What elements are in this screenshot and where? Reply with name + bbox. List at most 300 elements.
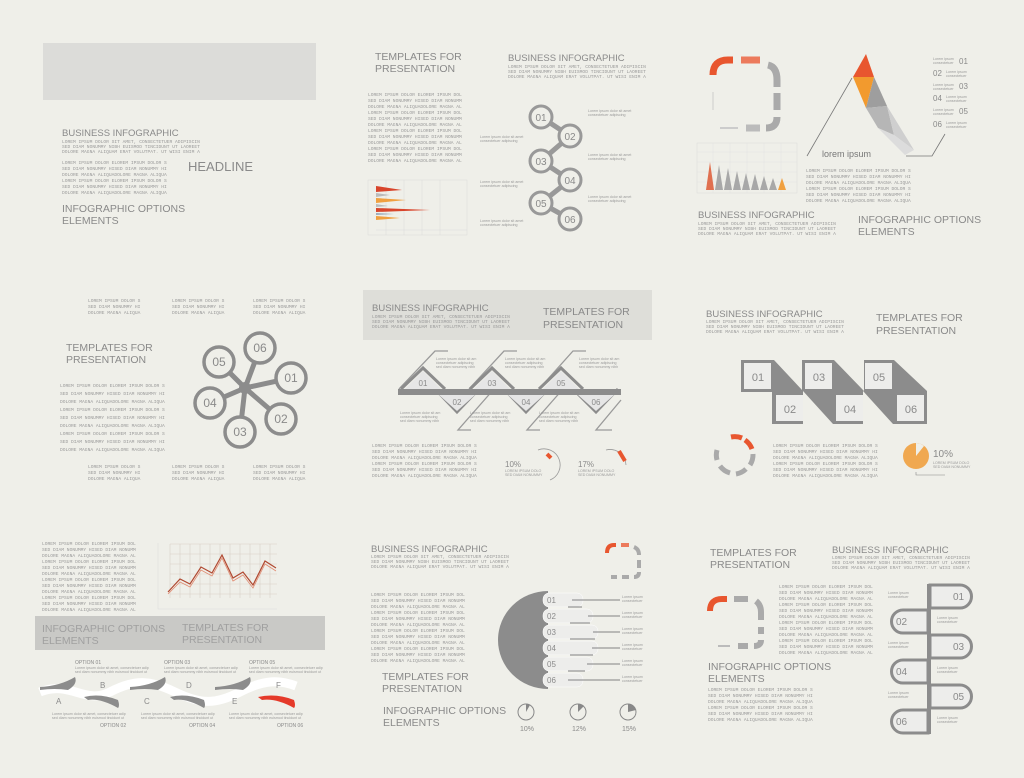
text block: DOLORE MAGNA ALIQUADOLORE MAGNA AL: [371, 604, 465, 610]
half circle chart 01-06: Lorem ipsum: [622, 627, 643, 631]
text block: DOLORE MAGNA ALIQUADOLORE MAGNA AL: [368, 104, 462, 110]
text block: LOREM IPSUM DOLOR ELOREM IPSUM DOLOR S: [806, 186, 911, 192]
pill steps 01-06: 06: [896, 717, 908, 728]
pies: 10% 12% 15%: 12%: [572, 726, 586, 733]
zigzag diagram 01-06: consectetuer adipiscing: [579, 361, 617, 365]
pill steps 01-06: consectetuer: [888, 645, 909, 649]
text blocks top: SED DIAM NONUMMY HI: [253, 304, 306, 310]
zigzag diagram 01-06: Lorem ipsum dolor sit am: [579, 357, 619, 361]
stat: 10%: SED DIAM NONUMMY: [505, 473, 543, 477]
text blocks bottom: LOREM IPSUM DOLOR S: [88, 464, 141, 470]
text block: [368, 92, 462, 164]
text block: SED DIAM NONUMMY HISED DIAM NONUMMY HI: [806, 174, 911, 180]
pill steps 01-06: 03: [953, 642, 965, 653]
text block: LOREM IPSUM DOLOR ELOREM IPSUM DOL: [371, 610, 465, 616]
heading: options: INFOGRAPHIC OPTIONS: [858, 214, 981, 226]
heading: business infographic: LOREM IPSUM DOLOR SIT AMET, CONSECTETUER ADIPISCIN: [508, 64, 646, 70]
heading: templates: [710, 547, 797, 571]
heading: business infographic: SED DIAM NONUMMY NIBH EUISMOD TINCIDUNT UT LAOREET: [698, 226, 836, 232]
text block: SED DIAM NONUMMY HISED DIAM NONUMM: [779, 608, 873, 614]
wave options A-F: sed diam nonummy nibh euismod tincidunt ut: [229, 716, 301, 720]
wave options A-F: sed diam nonummy nibh euismod tincidunt ut: [75, 670, 147, 674]
text block: DOLORE MAGNA ALIQUADOLORE MAGNA AL: [779, 614, 873, 620]
heading: business infographic: [372, 303, 510, 330]
text blocks bottom: SED DIAM NONUMMY HI: [253, 470, 306, 476]
zigzag diagram 01-06: sed diam nonummy nibh: [539, 419, 578, 423]
text block: [371, 592, 465, 664]
panel: bottom-middle half circle: [371, 544, 643, 733]
numbered list 01-06: 02: [933, 69, 942, 78]
numbered list 01-06: Lorem ipsum: [946, 95, 967, 99]
heading: business infographic: BUSINESS INFOGRAPHIC: [832, 545, 949, 556]
chain diagram 01-06: consectetuer adipiscing: [480, 139, 518, 143]
wave options A-F: OPTION 02: [100, 723, 126, 729]
heading: headline: HEADLINE: [188, 159, 253, 174]
text block: DOLORE MAGNA ALIQUADOLORE MAGNA AL: [368, 158, 462, 164]
heading: business infographic: DOLORE MAGNA ALIQUAM ERAT VOLUTPAT. UT WISI ENIM A: [371, 564, 509, 570]
heading: business infographic: SED DIAM NONUMMY NIBH EUISMOD TINCIDUNT UT LAOREET: [372, 319, 510, 325]
pill steps 01-06: Lorem ipsum: [937, 616, 958, 620]
zigzag diagram 01-06: 05: [557, 379, 566, 388]
heading: business infographic: DOLORE MAGNA ALIQUAM ERAT VOLUTPAT. UT WISI ENIM A: [508, 74, 646, 80]
pie: 10%: [903, 443, 971, 475]
wave options A-F: F: [276, 681, 281, 690]
pill steps 01-06: Lorem ipsum: [937, 716, 958, 720]
half circle chart 01-06: consectetuer: [622, 599, 643, 603]
flower diagram 01-06: 05: [212, 355, 226, 369]
text block: [773, 443, 878, 479]
folded steps 01-06: [741, 360, 927, 424]
half circle chart 01-06: 05: [547, 660, 556, 669]
text block: SED DIAM NONUMMY HISED DIAM NONUMM: [779, 626, 873, 632]
text block: DOLORE MAGNA ALIQUADOLORE MAGNA AL: [779, 632, 873, 638]
heading: business infographic: LOREM IPSUM DOLOR SIT AMET, CONSECTETUER ADIPISCIN: [832, 555, 970, 561]
half circle chart 01-06: 06: [547, 676, 556, 685]
text block: body: SED DIAM NONUMMY HISED DIAM NONUMMY HI: [62, 184, 167, 190]
text block: DOLORE MAGNA ALIQUADOLORE MAGNA AL: [42, 553, 136, 559]
chain diagram 01-06: consectetuer adipiscing: [480, 184, 518, 188]
zigzag diagram 01-06: Lorem ipsum dolor sit am: [436, 357, 476, 361]
text block: LOREM IPSUM DOLOR ELOREM IPSUM DOLOR S: [773, 461, 878, 467]
text blocks top: LOREM IPSUM DOLOR S: [88, 298, 141, 304]
text block: SED DIAM NONUMMY HISED DIAM NONUMM: [371, 616, 465, 622]
text block left: DOLORE MAGNA ALIQUADOLORE MAGNA ALIQUA: [60, 423, 165, 429]
chain diagram 01-06: 06: [564, 215, 576, 226]
text block: DOLORE MAGNA ALIQUADOLORE MAGNA ALIQUA: [708, 717, 813, 723]
heading: business infographic: BUSINESS INFOGRAPHIC: [372, 303, 489, 314]
text block: SED DIAM NONUMMY HISED DIAM NONUMM: [42, 601, 136, 607]
pill steps 01-06: consectetuer: [937, 720, 958, 724]
text block: DOLORE MAGNA ALIQUADOLORE MAGNA AL: [42, 589, 136, 595]
flower diagram 01-06: 06: [253, 341, 267, 355]
text block: LOREM IPSUM DOLOR ELOREM IPSUM DOL: [779, 638, 873, 644]
zigzag diagram 01-06: consectetuer adipiscing: [470, 415, 508, 419]
text block: intro: SED DIAM NONUMMY NIBH EUISMOD TINCIDUNT UT LAOREET: [62, 144, 200, 150]
text block: SED DIAM NONUMMY HISED DIAM NONUMM: [368, 152, 462, 158]
text block: DOLORE MAGNA ALIQUADOLORE MAGNA AL: [371, 640, 465, 646]
pill steps 01-06: 04: [896, 667, 908, 678]
text block: SED DIAM NONUMMY HISED DIAM NONUMMY HI: [708, 711, 813, 717]
text block: [42, 541, 136, 613]
chain diagram 01-06: Lorem ipsum dolor sit amet: [588, 153, 631, 157]
stat: 10%: LOREM IPSUM DOLO: [505, 469, 542, 473]
pies: 10% 12% 15%: [518, 704, 636, 733]
chain diagram 01-06: Lorem ipsum dolor sit amet: [480, 135, 523, 139]
panel: bottom-right pills: [708, 545, 972, 734]
numbered list 01-06: consectetuer: [933, 87, 954, 91]
numbered list 01-06: 04: [933, 94, 942, 103]
wave options A-F: B: [100, 681, 105, 690]
half circle chart 01-06: 04: [547, 644, 556, 653]
numbered list 01-06: consectetuer: [933, 61, 954, 65]
wave options A-F: D: [186, 681, 192, 690]
bar chart: [368, 180, 467, 235]
text block: LOREM IPSUM DOLOR ELOREM IPSUM DOL: [42, 541, 136, 547]
heading: templates: [375, 51, 462, 75]
chain diagram 01-06: 02: [564, 132, 576, 143]
line chart: [158, 543, 277, 609]
wave options A-F: C: [144, 697, 150, 706]
wave options A-F: E: [232, 697, 237, 706]
text block: LOREM IPSUM DOLOR ELOREM IPSUM DOL: [42, 577, 136, 583]
text block: LOREM IPSUM DOLOR ELOREM IPSUM DOL: [42, 595, 136, 601]
heading: templates: TEMPLATES FOR: [710, 547, 797, 559]
text block: SED DIAM NONUMMY HISED DIAM NONUMM: [779, 644, 873, 650]
zigzag diagram 01-06: consectetuer adipiscing: [436, 361, 474, 365]
text block left: DOLORE MAGNA ALIQUADOLORE MAGNA ALIQUA: [60, 447, 165, 453]
text block: LOREM IPSUM DOLOR ELOREM IPSUM DOL: [779, 584, 873, 590]
folded steps 01-06: 05: [873, 372, 885, 384]
pill steps 01-06: Lorem ipsum: [888, 641, 909, 645]
text block: body: LOREM IPSUM DOLOR ELOREM IPSUM DOLOR S: [62, 160, 167, 166]
pill steps 01-06: Lorem ipsum: [888, 591, 909, 595]
folded steps 01-06: 04: [844, 404, 856, 416]
half circle chart 01-06: Lorem ipsum: [622, 659, 643, 663]
zigzag diagram 01-06: consectetuer adipiscing: [505, 361, 543, 365]
text block left: [60, 383, 165, 453]
text block: intro: DOLORE MAGNA ALIQUAM ERAT VOLUTPAT. UT WISI ENIM A: [62, 149, 200, 155]
text blocks top: LOREM IPSUM DOLOR S: [172, 298, 225, 304]
panel: top-middle chain: [368, 51, 646, 235]
zigzag diagram 01-06: 01: [419, 379, 428, 388]
heading: business infographic: LOREM IPSUM DOLOR SIT AMET, CONSECTETUER ADIPISCIN: [372, 314, 510, 320]
heading: options: INFOGRAPHIC OPTIONS: [42, 623, 165, 635]
numbered list 01-06: consectetuer: [946, 125, 967, 129]
chain diagram 01-06: 01: [535, 113, 547, 124]
heading: options: ELEMENTS: [42, 635, 99, 647]
text block: LOREM IPSUM DOLOR ELOREM IPSUM DOL: [779, 602, 873, 608]
heading: templates: PRESENTATION: [876, 325, 956, 337]
stat: 17%: LOREM IPSUM DOLO: [578, 469, 615, 473]
text block: DOLORE MAGNA ALIQUADOLORE MAGNA ALIQUA: [806, 198, 911, 204]
text block: DOLORE MAGNA ALIQUADOLORE MAGNA ALIQUA: [708, 699, 813, 705]
text block left: SED DIAM NONUMMY HISED DIAM NONUMMY HI: [60, 415, 165, 421]
heading: options: [42, 623, 165, 647]
text block: DOLORE MAGNA ALIQUADOLORE MAGNA AL: [779, 596, 873, 602]
half circle chart 01-06: consectetuer: [622, 631, 643, 635]
chain diagram 01-06: Lorem ipsum dolor sit amet: [480, 180, 523, 184]
text block left: DOLORE MAGNA ALIQUADOLORE MAGNA ALIQUA: [60, 399, 165, 405]
text block: SED DIAM NONUMMY HISED DIAM NONUMMY HI: [372, 449, 477, 455]
text block: SED DIAM NONUMMY HISED DIAM NONUMM: [368, 134, 462, 140]
text blocks bottom: [88, 464, 306, 482]
heading: templates: PRESENTATION: [710, 559, 790, 571]
text block: [708, 687, 813, 723]
text block: DOLORE MAGNA ALIQUADOLORE MAGNA ALIQUA: [773, 455, 878, 461]
chain diagram 01-06: consectetuer adipiscing: [480, 223, 518, 227]
text block: LOREM IPSUM DOLOR ELOREM IPSUM DOLOR S: [806, 168, 911, 174]
heading: templates: TEMPLATES FOR: [382, 671, 469, 683]
wave options A-F: [40, 660, 323, 729]
pill steps 01-06: [888, 584, 972, 734]
wave options A-F: OPTION 04: [189, 723, 215, 729]
text block: SED DIAM NONUMMY HISED DIAM NONUMMY HI: [372, 467, 477, 473]
folded steps 01-06: 02: [784, 404, 796, 416]
zigzag diagram 01-06: 02: [453, 398, 462, 407]
text block: LOREM IPSUM DOLOR ELOREM IPSUM DOL: [371, 592, 465, 598]
text block left: LOREM IPSUM DOLOR ELOREM IPSUM DOLOR S: [60, 383, 165, 389]
text block: LOREM IPSUM DOLOR ELOREM IPSUM DOLOR S: [773, 443, 878, 449]
flower diagram 01-06: 04: [203, 396, 217, 410]
heading: options: [858, 214, 981, 238]
heading: templates: TEMPLATES FOR: [66, 342, 153, 354]
icon: dashed rounded square: [713, 60, 777, 128]
text block: DOLORE MAGNA ALIQUADOLORE MAGNA ALIQUA: [372, 473, 477, 479]
text block: LOREM IPSUM DOLOR ELOREM IPSUM DOL: [368, 146, 462, 152]
half circle chart 01-06: 01: [547, 596, 556, 605]
heading: templates: [876, 312, 963, 337]
half circle chart 01-06: consectetuer: [622, 679, 643, 683]
pill steps 01-06: 02: [896, 617, 908, 628]
heading: templates: [182, 622, 269, 646]
icon: dashed square: [710, 599, 761, 646]
numbered list 01-06: 01: [959, 57, 968, 66]
text block: body: LOREM IPSUM DOLOR ELOREM IPSUM DOLOR S: [62, 178, 167, 184]
flower diagram 01-06: 01: [284, 371, 298, 385]
half circle chart 01-06: Lorem ipsum: [622, 643, 643, 647]
heading: templates: [382, 671, 469, 695]
zigzag diagram 01-06: sed diam nonummy nibh: [505, 365, 544, 369]
half circle chart 01-06: Lorem ipsum: [622, 675, 643, 679]
numbered list 01-06: Lorem ipsum: [946, 121, 967, 125]
wave options A-F: OPTION 05: [249, 660, 275, 666]
wave options A-F: Lorem ipsum dolor sit amet, consectetuer adip: [52, 712, 126, 716]
half circle chart 01-06: consectetuer: [622, 647, 643, 651]
wave options A-F: A: [56, 697, 62, 706]
text block: SED DIAM NONUMMY HISED DIAM NONUMM: [42, 547, 136, 553]
wave options A-F: Lorem ipsum dolor sit amet, consectetuer adip: [75, 666, 149, 670]
numbered list 01-06: 05: [959, 107, 968, 116]
wave options A-F: sed diam nonummy nibh euismod tincidunt ut: [249, 670, 321, 674]
text block: LOREM IPSUM DOLOR ELOREM IPSUM DOLOR S: [372, 443, 477, 449]
pie: 10%: LOREM IPSUM DOLO: [933, 461, 970, 465]
panel: top-left headline: [43, 43, 316, 227]
stat: 17%: SED DIAM NONUMMY: [578, 473, 616, 477]
icon: dashed square small: [607, 545, 639, 577]
pill steps 01-06: consectetuer: [888, 695, 909, 699]
heading: business infographic: [508, 53, 646, 80]
text block: DOLORE MAGNA ALIQUADOLORE MAGNA ALIQUA: [773, 473, 878, 479]
heading: options: ELEMENTS: [383, 717, 440, 729]
stat: 10%: [505, 449, 560, 480]
text block: body: SED DIAM NONUMMY HISED DIAM NONUMMY HI: [62, 166, 167, 172]
heading: options: [62, 203, 185, 227]
heading: business infographic: BUSINESS INFOGRAPHIC: [508, 53, 625, 64]
pill steps 01-06: consectetuer: [937, 670, 958, 674]
text blocks top: LOREM IPSUM DOLOR S: [253, 298, 306, 304]
half circle chart 01-06: 03: [547, 628, 556, 637]
text block: body: DOLORE MAGNA ALIQUADOLORE MAGNA ALIQUA: [62, 190, 167, 196]
heading: business infographic: LOREM IPSUM DOLOR SIT AMET, CONSECTETUER ADIPISCIN: [706, 319, 844, 325]
numbered list 01-06: Lorem ipsum: [933, 108, 954, 112]
heading: business infographic: SED DIAM NONUMMY NIBH EUISMOD TINCIDUNT UT LAOREET: [832, 560, 970, 566]
wave options A-F: OPTION 03: [164, 660, 190, 666]
heading: business infographic: LOREM IPSUM DOLOR SIT AMET, CONSECTETUER ADIPISCIN: [371, 554, 509, 560]
pill steps 01-06: consectetuer: [937, 620, 958, 624]
text block: SED DIAM NONUMMY HISED DIAM NONUMMY HI: [806, 192, 911, 198]
chain diagram 01-06: consectetuer adipiscing: [588, 113, 626, 117]
pill steps 01-06: consectetuer: [888, 595, 909, 599]
heading: business infographic: DOLORE MAGNA ALIQUAM ERAT VOLUTPAT. UT WISI ENIM A: [372, 324, 510, 330]
folded steps 01-06: 06: [905, 404, 917, 416]
chain diagram 01-06: Lorem ipsum dolor sit amet: [480, 219, 523, 223]
panel: middle-left flower: [60, 298, 306, 482]
text block: SED DIAM NONUMMY HISED DIAM NONUMM: [779, 590, 873, 596]
text block: SED DIAM NONUMMY HISED DIAM NONUMM: [368, 116, 462, 122]
panel: top-right triangle: [697, 54, 981, 238]
chain diagram 01-06: Lorem ipsum dolor sit amet: [588, 195, 631, 199]
heading: business infographic: BUSINESS INFOGRAPHIC: [706, 309, 823, 320]
zigzag diagram 01-06: Lorem ipsum dolor sit am: [400, 411, 440, 415]
text block: LOREM IPSUM DOLOR ELOREM IPSUM DOL: [371, 628, 465, 634]
chain diagram 01-06: 04: [564, 176, 576, 187]
text block: LOREM IPSUM DOLOR ELOREM IPSUM DOL: [42, 559, 136, 565]
panel: middle zigzag timeline: [363, 290, 652, 480]
text block: LOREM IPSUM DOLOR ELOREM IPSUM DOL: [368, 92, 462, 98]
icon: dashed ring: [716, 437, 753, 474]
text block: DOLORE MAGNA ALIQUADOLORE MAGNA AL: [371, 658, 465, 664]
text block left: LOREM IPSUM DOLOR ELOREM IPSUM DOLOR S: [60, 431, 165, 437]
text blocks bottom: DOLORE MAGNA ALIQUA: [88, 476, 141, 482]
numbered list 01-06: consectetuer: [946, 99, 967, 103]
banner: [35, 616, 325, 650]
numbered list 01-06: 06: [933, 120, 942, 129]
zigzag diagram 01-06: consectetuer adipiscing: [539, 415, 577, 419]
text blocks top: DOLORE MAGNA ALIQUA: [172, 310, 225, 316]
heading: business infographic: BUSINESS INFOGRAPHIC: [371, 544, 488, 555]
folded steps 01-06: 03: [813, 372, 825, 384]
text block: DOLORE MAGNA ALIQUADOLORE MAGNA AL: [779, 650, 873, 656]
numbered list 01-06: consectetuer: [933, 112, 954, 116]
pill steps 01-06: Lorem ipsum: [937, 666, 958, 670]
heading: templates: TEMPLATES FOR: [182, 622, 269, 634]
numbered list 01-06: Lorem ipsum: [933, 57, 954, 61]
heading: business infographic: SED DIAM NONUMMY NIBH EUISMOD TINCIDUNT UT LAOREET: [371, 559, 509, 565]
heading: options: INFOGRAPHIC OPTIONS: [383, 705, 506, 717]
stat: 17%: 17%: [578, 460, 594, 469]
zigzag diagram 01-06: Lorem ipsum dolor sit am: [539, 411, 579, 415]
heading: business infographic: [832, 545, 970, 571]
half circle chart 01-06: consectetuer: [622, 615, 643, 619]
chain diagram 01-06: consectetuer adipiscing: [588, 199, 626, 203]
header band: [363, 290, 652, 340]
zigzag diagram 01-06: Lorem ipsum dolor sit am: [505, 357, 545, 361]
heading: business infographic: [706, 309, 844, 335]
text block: body: DOLORE MAGNA ALIQUADOLORE MAGNA ALIQUA: [62, 172, 167, 178]
numbered list 01-06: [933, 57, 968, 129]
text blocks top: DOLORE MAGNA ALIQUA: [88, 310, 141, 316]
wave options A-F: sed diam nonummy nibh euismod tincidunt ut: [141, 716, 213, 720]
half circle chart 01-06: 02: [547, 612, 556, 621]
heading: options: INFOGRAPHIC OPTIONS: [62, 203, 185, 215]
text block: SED DIAM NONUMMY HISED DIAM NONUMM: [371, 598, 465, 604]
chain diagram 01-06: consectetuer adipiscing: [588, 157, 626, 161]
text block: [806, 168, 911, 204]
heading: business infographic: DOLORE MAGNA ALIQUAM ERAT VOLUTPAT. UT WISI ENIM A: [698, 231, 836, 237]
text block: SED DIAM NONUMMY HISED DIAM NONUMM: [371, 652, 465, 658]
heading: business infographic: BUSINESS INFOGRAPHIC: [698, 210, 815, 221]
pie: 10%: SED DIAM NONUMMY: [933, 465, 971, 469]
flower diagram 01-06: 02: [274, 412, 288, 426]
heading: business infographic: [698, 210, 836, 237]
text block: intro: LOREM IPSUM DOLOR SIT AMET, CONSECTETUER ADIPISCIN: [62, 139, 200, 145]
spike chart: [697, 143, 797, 193]
text blocks top: SED DIAM NONUMMY HI: [172, 304, 225, 310]
chain diagram 01-06: 03: [535, 157, 547, 168]
heading: business infographic: BUSINESS INFOGRAPHIC: [62, 128, 179, 139]
flower diagram 01-06: 03: [233, 425, 247, 439]
zigzag diagram 01-06: sed diam nonummy nibh: [579, 365, 618, 369]
text block: DOLORE MAGNA ALIQUADOLORE MAGNA AL: [42, 607, 136, 613]
heading: templates: PRESENTATION: [375, 63, 455, 75]
folded steps 01-06: 01: [752, 372, 764, 384]
wave options A-F: Lorem ipsum dolor sit amet, consectetuer adip: [141, 712, 215, 716]
text block: LOREM IPSUM DOLOR ELOREM IPSUM DOL: [779, 620, 873, 626]
heading: options: [708, 661, 831, 685]
text block: LOREM IPSUM DOLOR ELOREM IPSUM DOLOR S: [708, 705, 813, 711]
numbered list 01-06: Lorem ipsum: [946, 70, 967, 74]
heading: templates: PRESENTATION: [66, 354, 146, 366]
heading: templates: PRESENTATION: [543, 319, 623, 331]
flower diagram 01-06: [195, 333, 306, 447]
text blocks top: [88, 298, 306, 316]
stat: 10%: 10%: [505, 460, 521, 469]
text block: SED DIAM NONUMMY HISED DIAM NONUMM: [371, 634, 465, 640]
zigzag diagram 01-06: Lorem ipsum dolor sit am: [470, 411, 510, 415]
numbered list 01-06: 03: [959, 82, 968, 91]
headline banner: [43, 43, 316, 100]
text block: SED DIAM NONUMMY HISED DIAM NONUMMY HI: [708, 693, 813, 699]
zigzag diagram 01-06: 03: [488, 379, 497, 388]
text blocks bottom: SED DIAM NONUMMY HI: [88, 470, 141, 476]
heading: templates: PRESENTATION: [182, 634, 262, 646]
zigzag diagram 01-06: consectetuer adipiscing: [400, 415, 438, 419]
text block: SED DIAM NONUMMY HISED DIAM NONUMMY HI: [773, 449, 878, 455]
text block: body: [62, 160, 167, 196]
zigzag diagram 01-06: sed diam nonummy nibh: [400, 419, 439, 423]
wave options A-F: sed diam nonummy nibh euismod tincidunt ut: [52, 716, 124, 720]
half circle chart 01-06: [498, 591, 643, 689]
heading: options: ELEMENTS: [708, 673, 765, 685]
text block: LOREM IPSUM DOLOR ELOREM IPSUM DOLOR S: [372, 461, 477, 467]
text blocks bottom: SED DIAM NONUMMY HI: [172, 470, 225, 476]
heading: business infographic: SED DIAM NONUMMY NIBH EUISMOD TINCIDUNT UT LAOREET: [508, 69, 646, 75]
heading: business infographic: DOLORE MAGNA ALIQUAM ERAT VOLUTPAT. UT WISI ENIM A: [832, 565, 970, 571]
numbered list 01-06: Lorem ipsum: [933, 83, 954, 87]
text blocks bottom: LOREM IPSUM DOLOR S: [253, 464, 306, 470]
pill steps 01-06: 05: [953, 692, 965, 703]
zigzag diagram 01-06: sed diam nonummy nibh: [436, 365, 475, 369]
